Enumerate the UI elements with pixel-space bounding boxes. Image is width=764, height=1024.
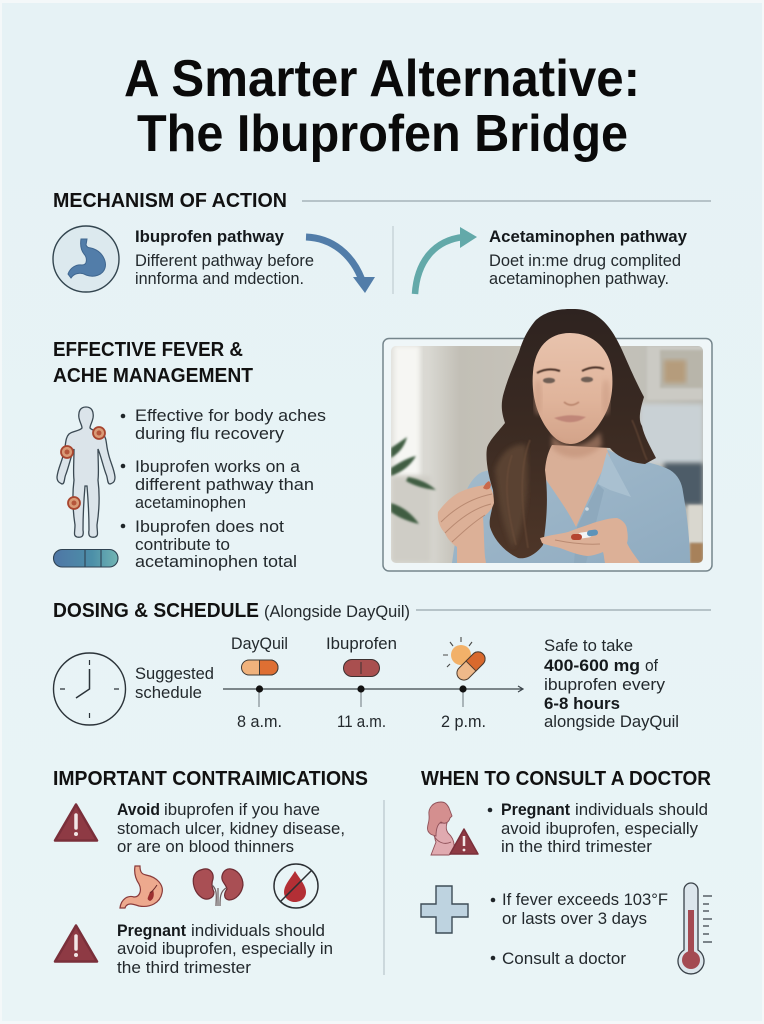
text: ibuprofen pathway: Different pathway before: [135, 252, 314, 270]
text: suggested schedule: Suggested: [135, 665, 214, 683]
text: ibuprofen pathway: Ibuprofen pathway: [135, 228, 285, 246]
label: 8 a.m.: 8 a.m.: [237, 713, 282, 731]
panel: contraindications: [55, 801, 345, 977]
panel: when to consult a doctor: [421, 801, 712, 974]
label: Ibuprofen: Ibuprofen: [326, 635, 397, 653]
text: pregnant bullet: in the third trimester: [501, 838, 653, 856]
text: dosing guidance: 400-600 mg: [544, 657, 640, 675]
label: 2 p.m.: 2 p.m.: [441, 713, 486, 731]
text: avoid ibuprofen: Avoid: [117, 801, 160, 819]
bullet list: fever and ache: Ibuprofen does not: [135, 518, 284, 536]
bullet list: fever and ache: acetaminophen: [135, 494, 246, 512]
neck shadow: [552, 432, 602, 457]
heading: important contraindications: IMPORTANT CONTRAIMICATIONS: [53, 767, 368, 790]
text: avoid ibuprofen: or are on blood thinners: [117, 838, 294, 856]
text: fever bullet: or lasts over 3 days: [502, 910, 647, 928]
bullet list: fever and ache: Effective for body aches: [135, 407, 326, 425]
icon: DayQuil capsule: [242, 660, 278, 675]
icon: kidneys: [193, 869, 243, 906]
text: consult bullet: Consult a doctor: [502, 950, 627, 968]
icon: warning triangle: [55, 926, 97, 962]
text: pregnant bullet: [488, 801, 708, 856]
bullet list: fever and ache: during flu recovery: [135, 425, 285, 443]
bullet list: fever and ache: contribute to: [135, 536, 230, 554]
heading: dosing and schedule: [53, 599, 410, 622]
heading: effective fever and ache management: EFFECTIVE FEVER &: [53, 338, 243, 361]
text: avoid ibuprofen: [117, 801, 345, 856]
text: avoid ibuprofen: stomach ulcer, kidney disease,: [117, 820, 345, 838]
text: suggested schedule: [135, 665, 214, 702]
icon: stomach in circle: [53, 226, 119, 292]
text: pregnant bullet: individuals should: [575, 801, 708, 819]
icon: clock: [54, 653, 126, 725]
text: pregnant warning: individuals should: [191, 922, 325, 940]
icon: medical cross: [421, 886, 468, 933]
panel: mechanism of action: [53, 226, 688, 294]
title: A Smarter Alternative:: [124, 50, 640, 108]
text: acetaminophen pathway: [489, 228, 688, 288]
heading: effective fever and ache management: [53, 338, 253, 387]
facial features: [537, 367, 604, 422]
text: ibuprofen pathway: [135, 228, 314, 288]
arrow: acetaminophen pathway: [415, 227, 477, 294]
icon: ibuprofen capsule: [344, 660, 380, 676]
heading: effective fever and ache management: ACHE MANAGEMENT: [53, 364, 253, 387]
text: suggested schedule: schedule: [135, 684, 202, 702]
text: dosing guidance: [544, 637, 679, 731]
label: 11 a.m.: 11 a.m.: [337, 713, 386, 731]
text: pregnant warning: Pregnant: [117, 922, 186, 940]
label: DayQuil: DayQuil: [231, 635, 288, 653]
icon: capsule: [54, 550, 118, 567]
text: dosing guidance: of: [645, 657, 658, 675]
icon: thermometer: [678, 883, 712, 974]
neck and chest: [545, 445, 610, 527]
text: ibuprofen pathway: innforma and mdection.: [135, 270, 304, 288]
text: pregnant warning: the third trimester: [117, 959, 252, 977]
pills: [571, 529, 598, 540]
icon: no blood thinners: [274, 864, 318, 908]
text: pregnant bullet: Pregnant: [501, 801, 570, 819]
bullet list: fever and ache: Ibuprofen works on a: [135, 458, 301, 476]
heading: when to consult a doctor: WHEN TO CONSULT A DOCTOR: [421, 767, 711, 790]
hair: [486, 309, 656, 558]
text: fever bullet: If fever exceeds 103°F: [502, 891, 668, 909]
text: dosing guidance: ibuprofen every: [544, 676, 666, 694]
shirt: [452, 450, 690, 563]
collar: [598, 452, 631, 497]
right hand: [540, 518, 640, 563]
timeline chart: [223, 635, 523, 731]
icon: sun and capsule: [443, 637, 488, 683]
text: avoid ibuprofen: ibuprofen if you have: [164, 801, 320, 819]
text: dosing guidance: Safe to take: [544, 637, 633, 655]
text: fever bullet: [491, 891, 668, 928]
text: dosing guidance: alongside DayQuil: [544, 713, 679, 731]
text: acetaminophen pathway: acetaminophen pathway.: [489, 270, 669, 288]
icon: body with joint pain: [57, 407, 115, 537]
icon: stomach ulcer: [120, 866, 162, 908]
title: The Ibuprofen Bridge: [137, 105, 628, 163]
text: dosing guidance: 6-8 hours: [544, 695, 620, 713]
bullet list: fever and ache: [121, 407, 326, 571]
title: [124, 50, 640, 163]
heading: dosing and schedule: (Alongside DayQuil): [264, 603, 410, 621]
bullet list: fever and ache: acetaminophen total: [135, 553, 297, 571]
icon: warning triangle: [55, 804, 97, 840]
text: acetaminophen pathway: Acetaminophen pathway: [489, 228, 688, 246]
text: pregnant bullet: avoid ibuprofen, especially: [501, 820, 699, 838]
photo: woman holding pills: [383, 309, 712, 571]
text: pregnant warning: [117, 922, 333, 977]
arrow: ibuprofen pathway: [306, 237, 375, 293]
icon: pregnant person with warning: [427, 802, 478, 855]
bullet list: fever and ache: different pathway than: [135, 476, 314, 494]
left hand: [438, 485, 494, 563]
face: [533, 333, 612, 444]
heading: mechanism of action: MECHANISM OF ACTION: [53, 189, 287, 212]
text: pregnant warning: avoid ibuprofen, especially in: [117, 940, 333, 958]
heading: dosing and schedule: DOSING & SCHEDULE: [53, 599, 259, 622]
text: acetaminophen pathway: Doet in:me drug complited: [489, 252, 681, 270]
